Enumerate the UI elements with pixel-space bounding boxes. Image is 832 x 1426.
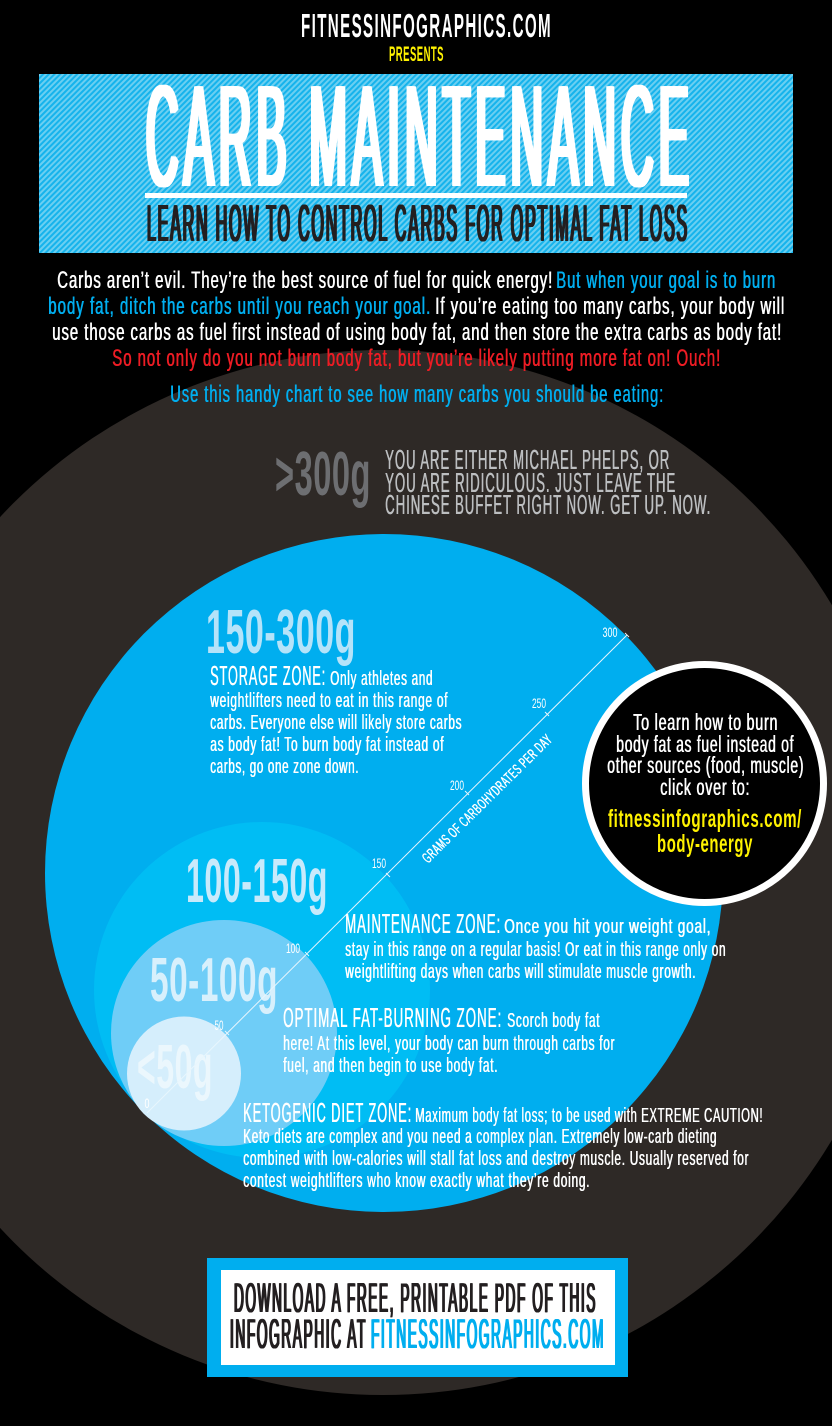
axis: grams of carbohydrates per day: 300 bbox=[602, 625, 618, 640]
ketogenic diet zone text bbox=[243, 1097, 763, 1192]
zone circle: 50-100g bbox=[111, 920, 337, 1146]
axis: grams of carbohydrates per day: GRAMS OF CARBOHYDRATES PER DAY bbox=[419, 731, 556, 867]
storage zone text: carbs, go one zone down. bbox=[210, 755, 359, 778]
storage zone text: weightlifters need to eat in this range of bbox=[209, 689, 448, 712]
over 300g zone text bbox=[275, 440, 711, 520]
zone range labels: 50-100g bbox=[150, 946, 278, 1015]
infographic canvas: PRESENTS bbox=[389, 43, 444, 66]
maintenance zone text bbox=[344, 908, 726, 983]
axis: grams of carbohydrates per day: 250 bbox=[532, 696, 546, 711]
optimal fat-burning zone text: Scorch body fat bbox=[507, 1009, 600, 1032]
axis: grams of carbohydrates per day: 200 bbox=[450, 778, 464, 793]
axis: grams of carbohydrates per day: 100 bbox=[286, 941, 300, 956]
axis: grams of carbohydrates per day: 50 bbox=[214, 1018, 224, 1033]
download box: INFOGRAPHIC AT bbox=[230, 1310, 367, 1357]
zone range labels: 150-300g bbox=[206, 598, 356, 667]
optimal fat-burning zone text: fuel, and then begin to use body fat. bbox=[283, 1054, 498, 1077]
over 300g zone text: >300g bbox=[275, 440, 371, 509]
dark outer circle: over 300g zone bbox=[0, 350, 832, 1395]
storage zone text: carbs. Everyone else will likely store carbs bbox=[210, 711, 462, 734]
storage zone text: Only athletes and bbox=[330, 667, 433, 690]
axis: grams of carbohydrates per day: 150 bbox=[372, 856, 386, 871]
zone circle: under 50g bbox=[127, 1016, 241, 1130]
callout: body energy link bbox=[586, 664, 824, 902]
zone range labels bbox=[137, 598, 356, 1102]
maintenance zone text: MAINTENANCE ZONE: bbox=[345, 908, 501, 939]
ketogenic diet zone text: KETOGENIC DIET ZONE: bbox=[243, 1097, 412, 1128]
maintenance zone text: Once you hit your weight goal, bbox=[504, 915, 711, 938]
zone circle: 150-300g bbox=[45, 534, 723, 1212]
download box bbox=[207, 1258, 628, 1377]
storage zone text: STORAGE ZONE: bbox=[210, 660, 326, 691]
storage zone text: as body fat! To burn body fat instead of bbox=[210, 733, 444, 756]
intro paragraph bbox=[48, 267, 785, 372]
axis: grams of carbohydrates per day bbox=[144, 625, 629, 1113]
title banner bbox=[39, 55, 793, 253]
zone range labels: <50g bbox=[137, 1033, 213, 1102]
ketogenic diet zone text: contest weightlifters who know exactly what they’re doing. bbox=[243, 1169, 590, 1192]
zone circle: 100-150g bbox=[94, 822, 430, 1158]
zone range labels: 100-150g bbox=[186, 847, 328, 916]
optimal fat-burning zone text bbox=[283, 1002, 615, 1077]
callout: body energy link: click over to: bbox=[660, 774, 750, 800]
callout: body energy link: body-energy bbox=[657, 830, 753, 858]
intro paragraph: body fat, ditch the carbs until you reach your goal. bbox=[48, 293, 431, 320]
optimal fat-burning zone text: OPTIMAL FAT-BURNING ZONE: bbox=[283, 1002, 502, 1033]
storage zone text bbox=[209, 660, 462, 778]
axis: grams of carbohydrates per day: 0 bbox=[144, 1096, 150, 1111]
